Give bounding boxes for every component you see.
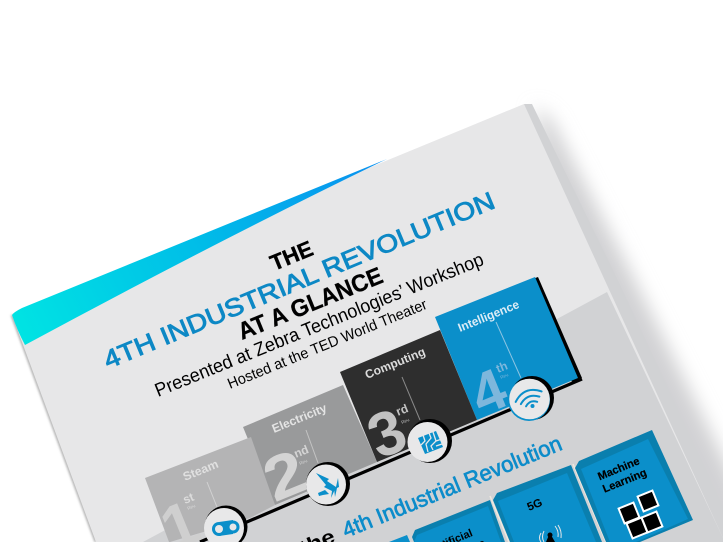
panel: computing: Rev. bbox=[400, 417, 411, 425]
panel: steam bbox=[145, 437, 275, 542]
card: machine learning bbox=[573, 430, 693, 542]
panel: computing: Computing bbox=[363, 345, 427, 382]
left edge shade bbox=[12, 315, 96, 542]
subtitle: presented at: Presented at Zebra Technologies’ Workshop bbox=[152, 249, 487, 402]
subtitle: hosted at: Hosted at the TED World Theater bbox=[225, 296, 430, 393]
card: 5G: 5G bbox=[526, 497, 544, 514]
icon: tower bbox=[540, 525, 561, 542]
panel: electricity: Electricity bbox=[270, 401, 329, 436]
page shadow bbox=[535, 106, 723, 542]
panel: steam: st bbox=[181, 490, 196, 507]
blue swoosh bbox=[12, 159, 387, 345]
panel: intelligence: Intelligence bbox=[456, 297, 522, 335]
icon: circuit board bbox=[408, 419, 452, 463]
title line: AT A GLANCE: AT A GLANCE bbox=[234, 262, 387, 346]
icon: wifi bbox=[508, 376, 554, 421]
panel: electricity bbox=[243, 385, 377, 516]
title bbox=[100, 187, 499, 375]
icon: steam chain bbox=[204, 506, 248, 542]
panel: steam: Steam bbox=[181, 457, 220, 484]
panel: electricity: nd bbox=[292, 442, 311, 461]
card: machine learning: Machine bbox=[596, 455, 642, 483]
panel: intelligence: th bbox=[494, 359, 510, 376]
number 4: 4 bbox=[461, 356, 516, 428]
panel: steam: Rev. bbox=[186, 503, 197, 511]
icon: lightning bolts bbox=[306, 462, 350, 506]
card: machine learning: Learning bbox=[601, 467, 649, 496]
panel: electricity: Rev. bbox=[298, 458, 309, 466]
panel: intelligence: Rev. bbox=[499, 372, 510, 380]
panel: intelligence bbox=[435, 277, 582, 428]
card: artificial intelligence bbox=[412, 500, 505, 542]
title line: THE: THE bbox=[266, 236, 317, 276]
panel: computing: rd bbox=[394, 401, 410, 419]
card: 5G bbox=[490, 465, 602, 542]
page side edge bbox=[524, 104, 723, 542]
timeline bar bbox=[200, 379, 582, 542]
section heading: 4th Industrial Revolution bbox=[338, 431, 565, 542]
icon: four squares bbox=[619, 491, 662, 538]
panel: computing bbox=[340, 330, 477, 472]
card: far left fragment bbox=[389, 535, 410, 542]
number 2: 2 bbox=[254, 437, 317, 516]
number 3: 3 bbox=[358, 396, 416, 472]
panel: page front bbox=[12, 104, 723, 542]
title line: 4TH INDUSTRIAL REVOLUTION: 4TH INDUSTRIAL REVOLUTION bbox=[100, 187, 499, 375]
